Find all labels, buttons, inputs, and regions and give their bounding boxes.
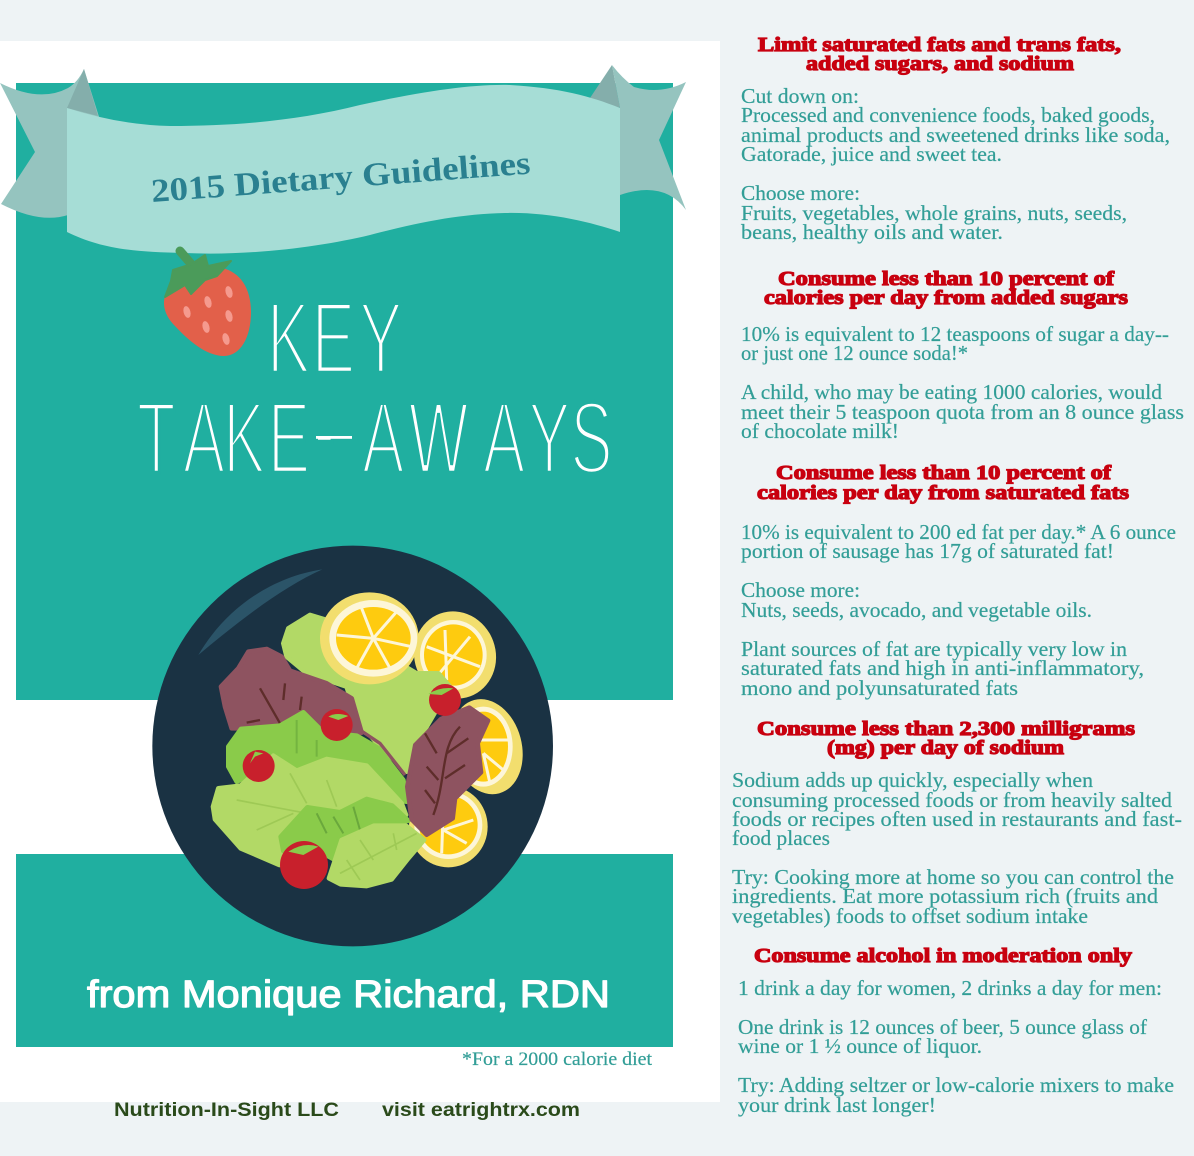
footer: company and website: Nutrition-In-Sight LLC (114, 1100, 339, 1121)
lettuce and radicchio leaves (213, 615, 488, 886)
section: limit saturated fats, sugars, sodium (741, 34, 1170, 244)
text: fat equivalent: 10% is equivalent to 200 ed fat per day.* A 6 ounce (741, 520, 1176, 544)
text: try seltzer (738, 1073, 1174, 1117)
text: child example: A child, who may be eating 1000 calories, would (741, 380, 1163, 404)
heading: calories per day from saturated fats (757, 482, 1129, 504)
heading: Limit saturated fats and trans fats, (758, 34, 1121, 56)
text: choose more fats (741, 578, 1092, 622)
text: one drink: One drink is 12 ounces of beer, 5 ounce glass of (738, 1015, 1147, 1039)
heading: Consume alcohol in moderation only (754, 945, 1132, 967)
panel: poster card (0, 41, 720, 1102)
ribbon banner (0, 65, 686, 254)
author credit: from Monique Richard, RDN (87, 974, 610, 1016)
text: choose more fats: Choose more: (741, 578, 860, 602)
heading: Consume less than 2,300 milligrams (757, 718, 1135, 740)
text: one drink: wine or 1 ½ ounce of liquor. (738, 1034, 982, 1058)
lemon slice on top (320, 592, 419, 684)
text: cut down on: Cut down on: (741, 84, 859, 108)
footer: company and website: visit eatrightrx.com (382, 1100, 580, 1121)
heading (757, 462, 1129, 504)
heading: (mg) per day of sodium (827, 737, 1064, 759)
text: sodium adds up: foods or recipes often used in restaurants and fast- (732, 807, 1182, 831)
section: sodium (732, 718, 1182, 928)
text: try seltzer: your drink last longer! (738, 1093, 936, 1117)
text: child example: of chocolate milk! (741, 419, 899, 443)
heading: KEY TAKE-AWAYS: TAKE-AWAYS (137, 372, 613, 495)
text: choose more: Fruits, vegetables, whole grains, nuts, seeds, (741, 201, 1127, 225)
footer: company and website (114, 1100, 580, 1121)
text: try cooking (732, 865, 1174, 928)
text: drinks per day: 1 drink a day for women, 2 drinks a day for men: (738, 976, 1162, 1000)
text: sugar equivalent: 10% is equivalent to 12 teaspoons of sugar a day-- (741, 322, 1169, 346)
heading: calories per day from added sugars (764, 287, 1128, 309)
text: choose more (741, 181, 1127, 244)
heading: Consume less than 10 percent of (778, 268, 1114, 290)
footnote: *For a 2000 calorie diet (462, 1049, 653, 1070)
text: sodium adds up: food places (732, 826, 830, 850)
section: saturated fats (741, 462, 1176, 700)
text: plant sources: Plant sources of fat are typically very low in (741, 637, 1128, 661)
section: added sugars (741, 268, 1184, 443)
text: try cooking: vegetables) foods to offset sodium intake (732, 904, 1088, 928)
text: try cooking: ingredients. Eat more potassium rich (fruits and (732, 884, 1159, 908)
text: choose more fats: Nuts, seeds, avocado, and vegetable oils. (741, 598, 1092, 622)
text: cut down on (741, 84, 1170, 166)
text: cut down on: Processed and convenience foods, baked goods, (741, 103, 1155, 127)
text: cut down on: animal products and sweetened drinks like soda, (741, 123, 1170, 147)
text: one drink (738, 1015, 1147, 1058)
lemon slices (402, 600, 533, 867)
text: sodium adds up: Sodium adds up quickly, especially when (732, 768, 1094, 792)
text: fat equivalent: portion of sausage has 17g of saturated fat! (741, 539, 1114, 563)
text: choose more: beans, healthy oils and water. (741, 220, 1003, 244)
text: sugar equivalent: or just one 12 ounce soda!* (741, 341, 968, 365)
illustration: salad plate (152, 546, 553, 946)
text: plant sources: saturated fats and high in anti-inflammatory, (741, 656, 1144, 680)
text: plant sources: mono and polyunsaturated fats (741, 676, 1018, 700)
text: child example: meet their 5 teaspoon quota from an 8 ounce glass (741, 400, 1184, 424)
text: plant sources (741, 637, 1144, 700)
heading (764, 268, 1128, 309)
text: sodium adds up: consuming processed foods or from heavily salted (732, 788, 1173, 812)
heading: KEY TAKE-AWAYS (137, 281, 613, 495)
heading: Consume less than 10 percent of (776, 462, 1111, 484)
banner title: 2015 Dietary Guidelines (150, 146, 532, 210)
heading (758, 34, 1121, 75)
heading: KEY TAKE-AWAYS: KEY (267, 281, 403, 396)
text: try cooking: Try: Cooking more at home so you can control the (732, 865, 1174, 889)
text: sodium adds up (732, 768, 1182, 850)
text: fat equivalent (741, 520, 1176, 563)
text: sugar equivalent (741, 322, 1169, 365)
section: alcohol (738, 945, 1174, 1117)
cherry tomatoes (243, 684, 461, 889)
text: child example (741, 380, 1184, 443)
text: choose more: Choose more: (741, 181, 860, 205)
heading: added sugars, and sodium (806, 53, 1074, 75)
text: try seltzer: Try: Adding seltzer or low-calorie mixers to make (738, 1073, 1174, 1097)
heading (757, 718, 1135, 759)
icon: strawberry (164, 251, 251, 356)
text: cut down on: Gatorade, juice and sweet tea. (741, 142, 1002, 166)
